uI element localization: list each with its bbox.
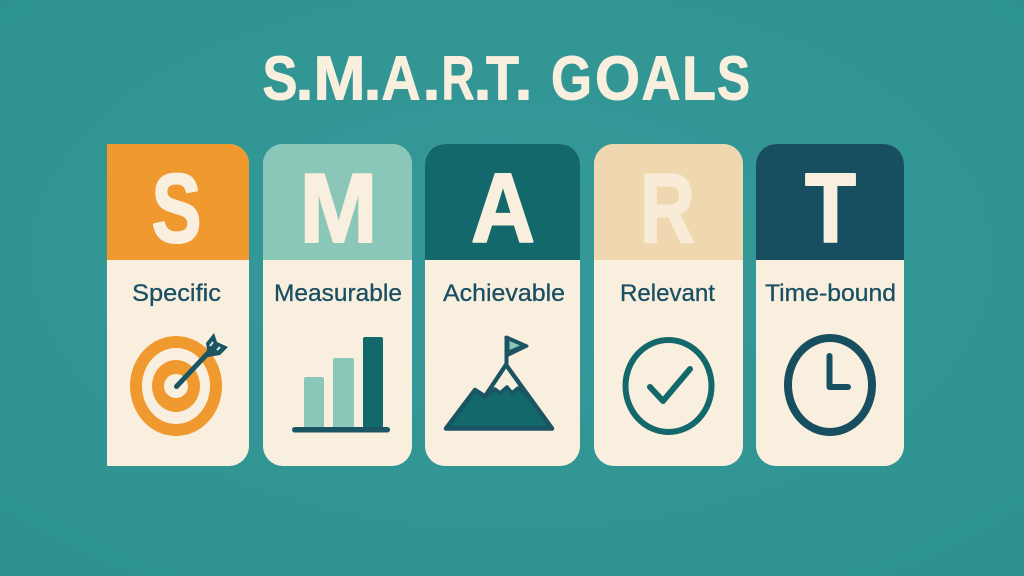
label Relevant: Relevant: [620, 280, 715, 307]
panel: Specific: [107, 144, 249, 466]
letter S: S: [152, 153, 202, 263]
title: S: [262, 44, 298, 114]
panel: Time-bound: [756, 144, 904, 466]
letter T: T: [805, 153, 856, 263]
panel: Achievable: [425, 144, 580, 466]
title: .: [296, 44, 314, 114]
title: A: [382, 44, 420, 114]
icon: clock: [788, 338, 872, 432]
title: G: [551, 44, 592, 114]
title: M: [314, 44, 366, 114]
panel: Relevant: [594, 144, 743, 466]
title: .: [422, 44, 440, 114]
label Time-bound: Time-bound: [765, 280, 896, 307]
title: S: [717, 44, 750, 114]
letter R: R: [640, 153, 695, 263]
title: R: [442, 44, 474, 114]
icon: check circle: [626, 340, 712, 432]
title: .: [474, 44, 492, 114]
letter M: M: [300, 153, 378, 263]
panel: Measurable: [263, 144, 412, 466]
title: O: [595, 44, 640, 114]
label Achievable: Achievable: [443, 280, 565, 307]
letter A: A: [471, 153, 535, 263]
icon: mountain with flag: [446, 336, 552, 428]
icon: bar chart: [292, 337, 390, 432]
label Measurable: Measurable: [274, 280, 402, 307]
icon: target with arrow: [130, 333, 228, 436]
title: .: [364, 44, 382, 114]
label Specific: Specific: [132, 280, 221, 307]
title: T: [486, 44, 519, 114]
title: L: [682, 44, 716, 114]
title: .: [514, 44, 532, 114]
title: A: [642, 44, 680, 114]
